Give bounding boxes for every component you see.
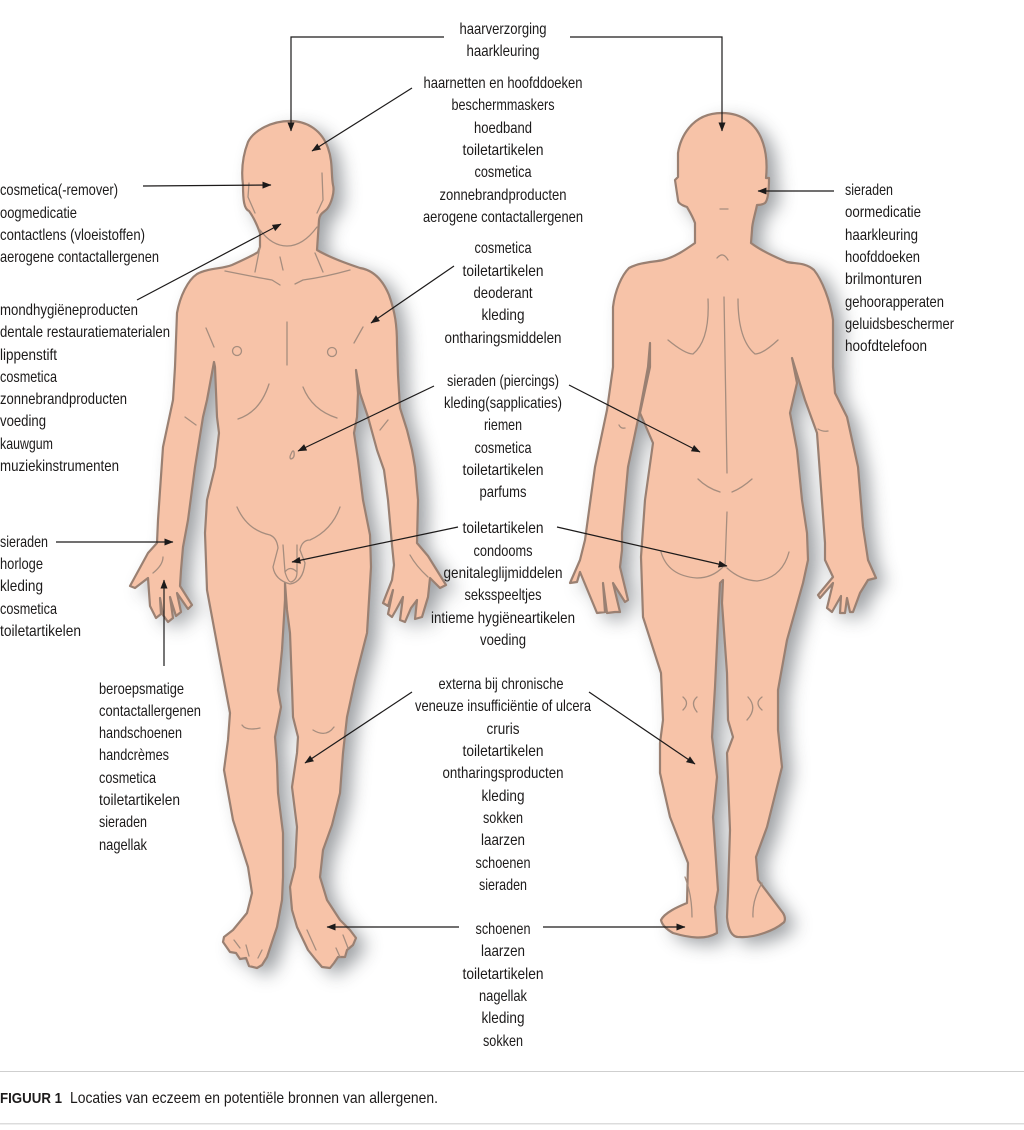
text: mouth xyxy=(0,302,170,475)
text: feet: nagellak xyxy=(479,988,527,1005)
text: scalp: beschermmaskers xyxy=(452,97,555,114)
text: wrist: sieraden xyxy=(0,534,48,551)
text: trunk: riemen xyxy=(484,417,522,434)
text: armpit xyxy=(444,240,562,347)
text: legs: sokken xyxy=(483,810,523,827)
text: wrist: toiletartikelen xyxy=(0,623,81,640)
text: ears: oormedicatie xyxy=(845,204,921,221)
text: mouth: voeding xyxy=(0,413,46,430)
text: hand: toiletartikelen xyxy=(99,792,180,809)
text: feet: kleding xyxy=(482,1010,524,1027)
text: hand: sieraden xyxy=(99,814,147,831)
knee and ankle lines xyxy=(683,697,762,917)
text: wrist: horloge xyxy=(0,556,43,573)
text: scalp: aerogene contactallergenen xyxy=(423,209,583,226)
text: armpit: deoderant xyxy=(474,285,533,302)
text: eye: aerogene contactallergenen xyxy=(0,249,159,266)
text: legs: ontharingsproducten xyxy=(442,765,564,782)
text: hand: handschoenen xyxy=(99,725,182,742)
arrow: front foot xyxy=(327,926,459,928)
text: legs: veneuze insufficiëntie of ulcera xyxy=(415,698,591,715)
text: legs: schoenen xyxy=(476,855,530,872)
arrow: ear xyxy=(758,190,834,192)
text: legs: kleding xyxy=(482,788,524,805)
caption: FIGUUR 1 xyxy=(0,1090,62,1107)
text: genitals: toiletartikelen xyxy=(462,520,544,537)
text: legs: toiletartikelen xyxy=(462,743,544,760)
text: armpit: cosmetica xyxy=(474,240,532,257)
text: armpit: toiletartikelen xyxy=(462,263,544,280)
arrow: eye xyxy=(143,185,271,186)
text: ears: sieraden xyxy=(845,182,893,199)
text: ears: hoofdtelefoon xyxy=(845,338,927,355)
text: feet: toiletartikelen xyxy=(462,966,544,983)
text: trunk: parfums xyxy=(480,484,527,501)
neck and shoulder blade lines xyxy=(619,209,828,473)
arrow: top left to head xyxy=(291,37,444,131)
arrow: mouth xyxy=(137,224,281,300)
text: legs xyxy=(415,676,591,894)
arrow: anus xyxy=(557,527,727,566)
text: scalp: toiletartikelen xyxy=(462,142,544,159)
arrow: top right to head xyxy=(570,37,722,131)
text: mouth: kauwgum xyxy=(0,436,53,453)
text: mouth: cosmetica xyxy=(0,369,57,386)
groin lines xyxy=(237,507,340,584)
arrow: wrist xyxy=(56,541,173,543)
text: feet: sokken xyxy=(483,1033,523,1050)
text: genitals: seksspeeltjes xyxy=(464,587,542,604)
text: ears: brilmonturen xyxy=(845,271,922,288)
text: wrist: cosmetica xyxy=(0,601,57,618)
text: feet: schoenen xyxy=(476,921,530,938)
text: legs: sieraden xyxy=(479,877,527,894)
text: mouth: lippenstift xyxy=(0,347,58,364)
text: mouth: dentale restauratiematerialen xyxy=(0,324,170,341)
lower back and buttock lines xyxy=(661,479,789,581)
text: armpit: ontharingsmiddelen xyxy=(444,330,562,347)
text: mouth: muziekinstrumenten xyxy=(0,458,119,475)
text: scalp: hoedband xyxy=(474,120,532,137)
text: hand xyxy=(99,681,201,854)
text: legs: laarzen xyxy=(481,832,525,849)
text: legs: cruris xyxy=(486,721,520,738)
text: genitals: intieme hygiëneartikelen xyxy=(431,610,575,627)
face and neck lines xyxy=(248,173,323,272)
arrow: hand xyxy=(163,580,165,666)
text: armpit: kleding xyxy=(482,307,524,324)
text: ears: geluidsbeschermer xyxy=(845,316,954,333)
text: wrist: kleding xyxy=(0,578,43,595)
text: trunk: cosmetica xyxy=(474,440,532,457)
text: ears: gehoorapperaten xyxy=(845,294,944,311)
text: ears: hoofddoeken xyxy=(845,249,920,266)
text: feet: laarzen xyxy=(481,943,525,960)
arrow: armpit xyxy=(371,266,454,323)
text: feet xyxy=(462,921,544,1050)
text: hair xyxy=(460,21,546,60)
arrow: genitals xyxy=(292,527,458,562)
text: hand: nagellak xyxy=(99,837,147,854)
text: genitals xyxy=(431,520,575,649)
text: trunk xyxy=(444,373,562,501)
text: scalp: zonnebrandproducten xyxy=(440,187,566,204)
text: wrist xyxy=(0,534,81,640)
text: eye xyxy=(0,182,159,266)
arrow: lower back xyxy=(569,385,700,452)
text: scalp: cosmetica xyxy=(474,164,532,181)
text: hair: haarverzorging xyxy=(460,21,546,38)
text: hand: cosmetica xyxy=(99,770,156,787)
text: trunk: kleding(sapplicaties) xyxy=(444,395,562,412)
text: trunk: toiletartikelen xyxy=(462,462,544,479)
arrow: back foot xyxy=(543,926,685,928)
text: hand: beroepsmatige xyxy=(99,681,184,698)
text: eye: oogmedicatie xyxy=(0,205,77,222)
text: legs: externa bij chronische xyxy=(438,676,564,693)
text: eye: cosmetica(-remover) xyxy=(0,182,118,199)
hand, knee and toe lines xyxy=(153,555,428,958)
arrow: scalp xyxy=(312,88,412,151)
chest lines xyxy=(185,270,388,459)
figure: back body xyxy=(570,113,886,945)
arrow: navel xyxy=(298,386,434,451)
text: ears xyxy=(845,182,954,355)
arrow: front leg xyxy=(305,692,412,763)
text: trunk: sieraden (piercings) xyxy=(447,373,559,390)
caption xyxy=(0,1071,1024,1124)
caption: Locaties van eczeem en potentiële bronnen van allergenen. xyxy=(70,1090,438,1107)
text: mouth: mondhygiëneproducten xyxy=(0,302,138,319)
text: ears: haarkleuring xyxy=(845,227,918,244)
text: hair: haarkleuring xyxy=(466,43,540,60)
text: mouth: zonnebrandproducten xyxy=(0,391,127,408)
text: genitals: voeding xyxy=(480,632,526,649)
text: scalp: haarnetten en hoofddoeken xyxy=(424,75,582,92)
figure: front body xyxy=(130,121,456,975)
text: genitals: condooms xyxy=(474,543,533,560)
text: genitals: genitaleglijmiddelen xyxy=(444,565,562,582)
text: hand: contactallergenen xyxy=(99,703,201,720)
text: eye: contactlens (vloeistoffen) xyxy=(0,227,145,244)
text: hand: handcrèmes xyxy=(99,747,169,764)
text: scalp xyxy=(423,75,583,226)
arrow: back leg xyxy=(589,692,695,764)
